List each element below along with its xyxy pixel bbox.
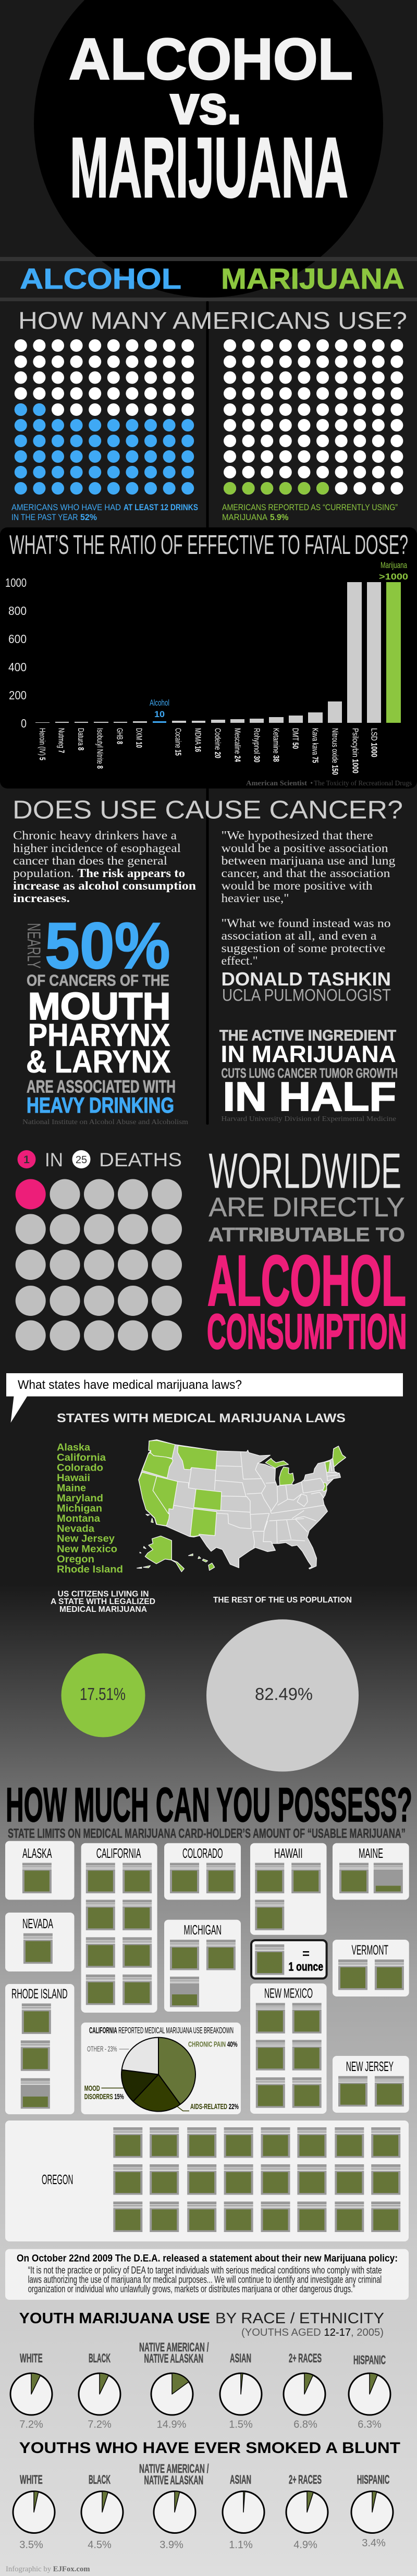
panel: California use breakdown pie — [81, 2023, 241, 2114]
pie label: AIDS-related: AIDS-RELATED 22% — [190, 2102, 239, 2111]
caption: marijuana use — [222, 503, 398, 522]
source: Harvard: Harvard University Division of Experimental Medicine — [221, 1115, 396, 1123]
y axis labels: 600 — [8, 632, 27, 646]
text block: tashkin quote: would be more positive with — [221, 879, 373, 892]
panel: Maine: MAINE — [359, 1845, 383, 1861]
state list: Maryland — [57, 1493, 103, 1504]
race labels: row two: BLACK — [89, 2473, 111, 2487]
quote attribution — [221, 968, 391, 1005]
source credit: The Toxicity of Recreational Drugs — [314, 779, 412, 787]
panel: DEA statement — [5, 2249, 409, 2300]
heading: 1 in 25 deaths: 1 — [23, 1154, 30, 1166]
bar labels: Datura 8 — [76, 728, 85, 750]
race labels: row one: HISPANIC — [353, 2353, 386, 2367]
text block: alcohol cancer risk: population. — [13, 867, 74, 880]
quote attribution: DONALD TASHKIN — [221, 968, 391, 990]
bar labels: DXM 10 — [134, 728, 143, 748]
callout: nearly 50 percent of cancers: ARE ASSOCIATED WITH — [27, 1077, 176, 1096]
y axis labels: 200 — [9, 688, 27, 702]
text block: alcohol cancer risk: The risk appears to — [77, 867, 185, 880]
dot grid: marijuana 5.9 percent — [224, 339, 403, 495]
text block: alcohol cancer risk: cancer than does the general — [13, 854, 167, 867]
caption: marijuana use: MARIJUANA — [222, 513, 267, 522]
panel: Michigan — [164, 1920, 241, 2012]
text block: tashkin quote — [221, 829, 396, 967]
bar labels: MDMA 16 — [193, 728, 202, 752]
bar labels: Nutmeg 7 — [56, 728, 66, 753]
race labels: row two: NATIVE AMERICAN / — [139, 2462, 209, 2476]
text block: alcohol cancer risk — [13, 829, 196, 905]
pie chart: California breakdown — [121, 2038, 195, 2112]
state list: Rhode Island — [57, 1563, 123, 1575]
race labels: row one: 2+ RACES — [289, 2351, 322, 2365]
map: united states medical marijuana states — [137, 1440, 346, 1572]
caption: alcohol use: AT LEAST 12 DRINKS — [124, 503, 198, 512]
source credit: American Scientist — [246, 779, 308, 787]
bar labels: DMT 50 — [291, 728, 299, 749]
percentages: youth use: 7.2% — [88, 2419, 112, 2431]
heading: youth marijuana use by race — [19, 2310, 384, 2338]
panel: Rhode Island: RHODE ISLAND — [11, 1986, 68, 2002]
callout: nearly 50 percent of cancers: NEARLY — [23, 923, 44, 968]
bar labels: Codeine 20 — [213, 728, 222, 758]
circle: 82.49 percent: 82.49% — [255, 1684, 313, 1704]
state list: Maine — [57, 1482, 86, 1494]
percentages: youth use: 7.2% — [19, 2419, 43, 2431]
race labels: row two — [20, 2462, 389, 2487]
text block: tashkin quote: association at all, and even a — [221, 929, 376, 942]
text block: alcohol cancer risk: increases. — [13, 892, 70, 905]
speech bubble: what states have medical marijuana laws — [6, 1373, 403, 1423]
pie label: other: OTHER - 23% — [87, 2045, 117, 2054]
bar labels: GHB 8 — [115, 728, 124, 744]
percentages: blunt use: 3.5% — [19, 2539, 43, 2550]
panel: Maine — [333, 1843, 409, 1900]
panel: Michigan: MICHIGAN — [183, 1922, 222, 1938]
percentages: youth use: 6.8% — [293, 2419, 317, 2431]
state list: Nevada — [57, 1523, 94, 1534]
pie label: mood disorders — [84, 2084, 124, 2101]
panel: New Mexico — [250, 1983, 326, 2114]
band divider top — [0, 257, 417, 261]
caption: marijuana use: 5.9% — [270, 513, 289, 522]
race labels: row two: ASIAN — [230, 2473, 251, 2487]
race labels: row two: NATIVE ALASKAN — [144, 2473, 203, 2487]
panel: Hawaii — [250, 1843, 326, 1935]
panel: effective to fatal dose chart — [0, 527, 417, 788]
circle: 17.51 percent: 17.51% — [80, 1684, 126, 1704]
panel: Alaska: ALASKA — [22, 1845, 52, 1861]
panel: Alaska — [5, 1841, 74, 1900]
heading: marijuana column: MARIJUANA — [221, 262, 404, 295]
percentages: youth use: 6.3% — [358, 2419, 382, 2431]
text block: tashkin quote: effect." — [221, 954, 257, 967]
percentages: youth use: 1.5% — [229, 2419, 253, 2431]
percentages: blunt use: 3.4% — [362, 2537, 386, 2549]
band divider bottom — [0, 298, 417, 301]
heading: how many americans use: HOW MANY AMERICANS USE? — [18, 307, 407, 334]
text block: tashkin quote: between marijuana use and lung — [221, 854, 396, 867]
pie label: chronic pain: CHRONIC PAIN 40% — [188, 2040, 238, 2049]
text block: alcohol cancer risk: increase as alcohol consumption — [13, 879, 196, 892]
callout: alcohol 10: Alcohol — [150, 698, 169, 708]
state list: California — [57, 1452, 106, 1463]
dot grid: 1 in 25 deaths — [16, 1179, 182, 1351]
caption: citizens in legal states — [51, 1589, 155, 1614]
heading: 1 in 25 deaths — [18, 1149, 182, 1170]
bar labels: Rohypnol 30 — [252, 728, 261, 762]
text block: tashkin quote: suggestion of some protective — [221, 942, 386, 955]
pie charts: blunt use by race — [13, 2491, 393, 2533]
bar labels: Heroin (IV) 5 — [38, 728, 46, 760]
panel: Hawaii: HAWAII — [274, 1845, 303, 1861]
callout: worldwide attributable to alcohol: ATTRIBUTABLE TO — [208, 1224, 405, 1246]
panel: Vermont — [333, 1940, 409, 1996]
bar labels: LSD 1000 — [369, 728, 378, 757]
y axis labels: 800 — [8, 604, 27, 618]
panel: California use breakdown pie: CALIFORNIA REPORTED MEDICAL MARIJUANA USE BREAKDOWN — [89, 2025, 234, 2036]
title: vs. — [170, 75, 241, 135]
percentages: blunt use: 1.1% — [229, 2539, 253, 2550]
callout: nearly 50 percent of cancers: OF CANCERS OF THE — [27, 971, 169, 989]
dot grid: alcohol 52 percent — [15, 339, 194, 495]
panel: Oregon — [5, 2121, 409, 2241]
race labels: row two: WHITE — [20, 2473, 43, 2487]
heading: youth marijuana use by race: YOUTH MARIJUANA USE — [19, 2310, 210, 2327]
bar labels: Kava kava 75 — [311, 728, 319, 763]
heading: youth marijuana use by race: (YOUTHS AGED 12-17, 2005) — [241, 2327, 384, 2338]
panel: Oregon: OREGON — [42, 2172, 73, 2187]
speech bubble: what states have medical marijuana laws: What states have medical marijuana laws? — [18, 1378, 242, 1392]
callout: nearly 50 percent of cancers: HEAVY DRINKING — [27, 1093, 174, 1117]
title: ALCOHOL — [69, 27, 353, 92]
caption: alcohol use: 52% — [80, 513, 97, 522]
y axis labels — [5, 576, 27, 730]
state list: Michigan — [57, 1503, 102, 1514]
heading: youth marijuana use by race: BY RACE / ETHNICITY — [215, 2310, 384, 2327]
panel: New Mexico: NEW MEXICO — [264, 1986, 313, 2001]
text block: tashkin quote: cancer, and that the association — [221, 867, 390, 880]
percentages: blunt use — [19, 2537, 386, 2550]
callout: marijuana over 1000: >1000 — [379, 572, 408, 582]
callout: nearly 50 percent of cancers: PHARYNX — [28, 1017, 170, 1053]
callout: worldwide attributable to alcohol: ARE DIRECTLY — [208, 1192, 404, 1223]
heading: 1 in 25 deaths: DEATHS — [99, 1149, 182, 1170]
state list: New Jersey — [57, 1533, 115, 1545]
heading: does use cause cancer: DOES USE CAUSE CANCER? — [13, 796, 403, 824]
pie charts: youth use by race — [10, 2373, 390, 2415]
race labels: row one: NATIVE ALASKAN — [144, 2352, 203, 2366]
percentages: youth use — [19, 2419, 382, 2431]
y axis labels: 1000 — [5, 576, 27, 589]
panel: Rhode Island — [5, 1984, 74, 2114]
bar labels — [38, 728, 378, 775]
race labels: row one — [20, 2340, 386, 2367]
caption: citizens in legal states: MEDICAL MARIJUANA — [59, 1605, 147, 1614]
panel: New Jersey — [333, 2056, 409, 2113]
DEA quote — [28, 2265, 382, 2295]
panel: Colorado: COLORADO — [182, 1845, 223, 1861]
race labels: row one: WHITE — [20, 2351, 43, 2365]
callout: nearly 50 percent of cancers: MOUTH — [28, 985, 171, 1028]
title — [69, 27, 353, 215]
caption: rest of population: THE REST OF THE US POPULATION — [213, 1596, 352, 1605]
state list: Montana — [57, 1513, 100, 1524]
caption: alcohol use: IN THE PAST YEAR — [11, 513, 78, 522]
callout: nearly 50 percent of cancers: 50% — [45, 910, 170, 982]
bars — [35, 582, 401, 723]
callout: active ingredient cuts tumor growth: IN MARIJUANA — [221, 1041, 396, 1067]
vertical column divider — [206, 301, 208, 1125]
heading: alcohol column: ALCOHOL — [20, 262, 181, 295]
race labels: row one: ASIAN — [230, 2351, 251, 2365]
pie label: AIDS-related — [177, 2102, 239, 2111]
panel: California — [81, 1843, 157, 2013]
text block: tashkin quote: would be a positive association — [221, 842, 388, 855]
callout: alcohol 10: 10 — [154, 709, 165, 719]
text block: tashkin quote: "We hypothesized that there — [221, 829, 373, 842]
state list: Hawaii — [57, 1472, 90, 1484]
caption: alcohol use: AMERICANS WHO HAVE HAD — [11, 503, 121, 512]
percentages: blunt use: 4.5% — [88, 2539, 112, 2550]
text block: alcohol cancer risk: Chronic heavy drinkers have a — [13, 829, 177, 842]
heading: 1 in 25 deaths: IN — [45, 1149, 63, 1170]
y axis labels: 0 — [21, 717, 27, 730]
percentages: blunt use: 3.9% — [160, 2539, 183, 2550]
quote attribution: UCLA PULMONOLOGIST — [222, 986, 391, 1005]
text block: alcohol cancer risk: higher incidence of esophageal — [13, 842, 181, 855]
bar labels: Mescaline 24 — [232, 728, 242, 762]
source: NIAAA: National Institute on Alcohol Abuse and Alcoholism — [22, 1118, 188, 1126]
bar labels: Cocaine 15 — [173, 728, 182, 756]
title backdrop: black circle — [34, 0, 383, 298]
circle: 17.51 percent — [62, 1653, 145, 1737]
heading: states with medical marijuana laws: STATES WITH MEDICAL MARIJUANA LAWS — [57, 1411, 346, 1425]
legend: one bag equals one ounce: = — [302, 1947, 310, 1961]
credit: Infographic by EJFox.com — [6, 2565, 90, 2573]
legend: one bag equals one ounce — [251, 1940, 327, 1978]
state list: New Mexico — [57, 1544, 117, 1555]
percentages: blunt use: 4.9% — [293, 2539, 317, 2550]
race labels: row two: HISPANIC — [357, 2473, 389, 2487]
bar labels: Isobutyl Nitrite 8 — [95, 728, 104, 769]
heading: youths who have ever smoked a blunt: YOUTHS WHO HAVE EVER SMOKED A BLUNT — [19, 2439, 400, 2457]
panel: Nevada — [5, 1913, 74, 1971]
caption: alcohol use — [11, 503, 198, 522]
circle: 82.49 percent — [206, 1619, 359, 1771]
state list: Oregon — [57, 1554, 94, 1565]
state list: Alaska — [57, 1441, 90, 1453]
callout: marijuana over 1000 — [379, 560, 408, 582]
race labels: row two: 2+ RACES — [289, 2473, 322, 2487]
bar labels: Psilocybin 1000 — [350, 728, 360, 773]
panel: Colorado — [164, 1843, 241, 1900]
bar labels: Nitrous oxide 150 — [330, 728, 339, 775]
pie label: mood disorders: DISORDERS 15% — [84, 2092, 124, 2101]
callout: worldwide attributable to alcohol — [207, 1143, 407, 1359]
state list — [57, 1441, 123, 1575]
y axis labels: 400 — [8, 660, 27, 674]
heading: 1 in 25 deaths: 25 — [76, 1154, 87, 1166]
percentages: youth use: 14.9% — [157, 2419, 187, 2431]
callout: nearly 50 percent of cancers — [23, 910, 176, 1117]
state list: Colorado — [57, 1462, 103, 1474]
callout: alcohol 10 — [150, 698, 169, 719]
callout: nearly 50 percent of cancers: & LARYNX — [26, 1044, 171, 1079]
source credit: • — [309, 779, 314, 787]
bar labels: Ketamine 38 — [271, 728, 280, 762]
legend: one bag equals one ounce: 1 ounce — [289, 1960, 323, 1974]
text block: tashkin quote: heavier use," — [221, 892, 289, 905]
callout: active ingredient cuts tumor growth — [219, 1028, 398, 1119]
callout: active ingredient cuts tumor growth: IN HALF — [223, 1074, 396, 1119]
caption: citizens in legal states: US CITIZENS LIVING IN — [57, 1589, 149, 1598]
text block: tashkin quote: "What we found instead was no — [221, 917, 391, 930]
race labels: row one: NATIVE AMERICAN / — [139, 2340, 209, 2355]
pie label: mood disorders: MOOD — [84, 2084, 100, 2093]
callout: active ingredient cuts tumor growth: THE ACTIVE INGREDIENT — [219, 1028, 396, 1044]
panel: Nevada: NEVADA — [22, 1916, 53, 1931]
race labels: row one: BLACK — [89, 2351, 111, 2365]
panel: California: CALIFORNIA — [96, 1845, 141, 1861]
caption: citizens in legal states: A STATE WITH LEGALIZED — [51, 1597, 155, 1606]
